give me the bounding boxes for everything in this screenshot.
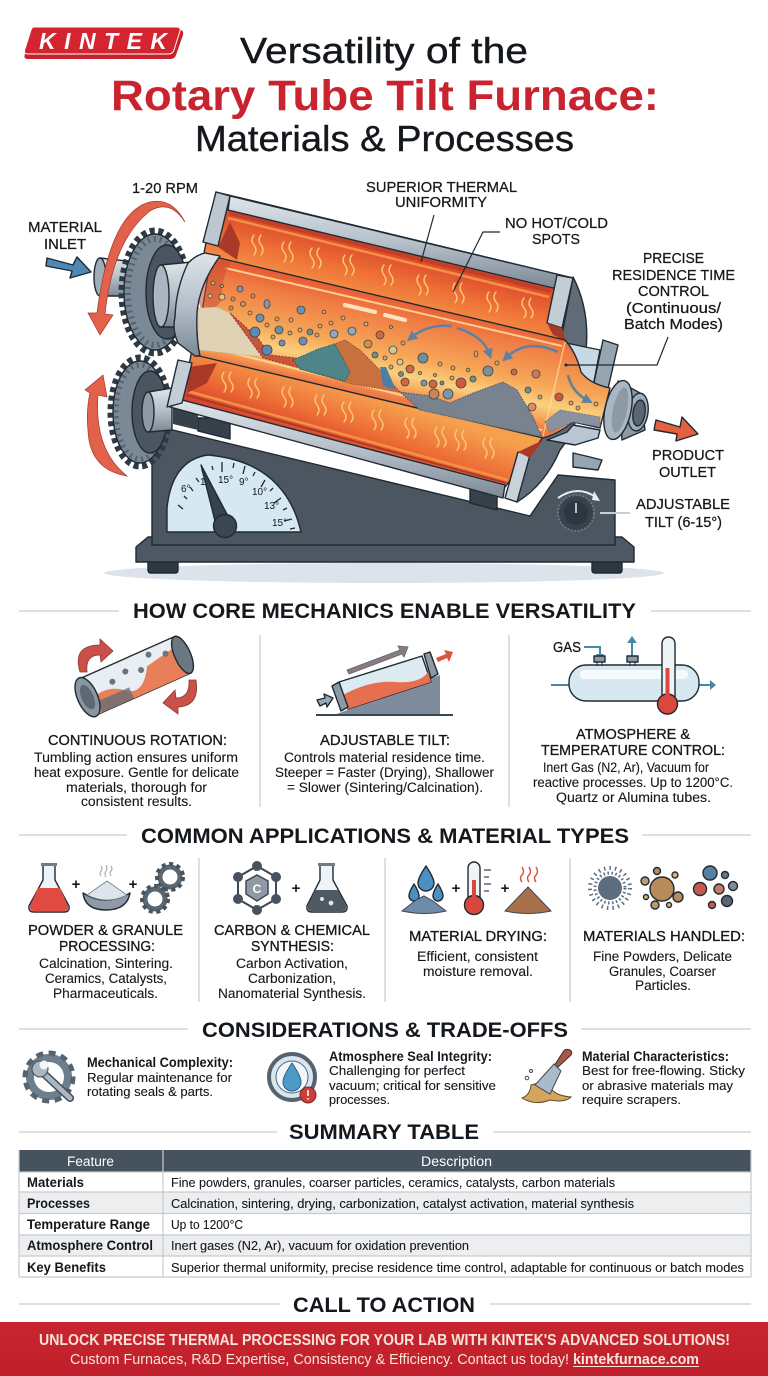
panel: adjustable tilt: ADJUSTABLE TILT: — [320, 733, 450, 749]
summary table: Fine powders, granules, coarser particles, ceramics, catalysts, carbon materials — [171, 1176, 615, 1190]
tube left collar — [174, 253, 220, 356]
summary table — [19, 1150, 751, 1277]
furnace labels: (Continuous/ — [626, 300, 722, 317]
tilt gauge: 9° — [239, 477, 249, 488]
tilt knob — [558, 491, 600, 531]
panel: atmosphere and temperature: Inert Gas (N2, Ar), Vacuum for — [543, 760, 709, 775]
tilt gauge: 13° — [264, 501, 279, 512]
tilt gauge — [167, 455, 301, 538]
icon: molecule and flask — [233, 861, 347, 915]
title: Rotary Tube Tilt Furnace: — [111, 72, 659, 120]
summary table: Feature — [67, 1154, 114, 1169]
panel: continuous rotation: CONTINUOUS ROTATION: — [48, 733, 227, 749]
call to action banner — [0, 1322, 768, 1376]
icon: molecule and flask: C — [253, 882, 262, 896]
icon: droplets, thermometer, heat — [402, 862, 551, 914]
panel: continuous rotation: materials, thorough for — [66, 780, 208, 795]
tilt gauge: 1° — [200, 477, 210, 488]
outlet arrow — [654, 417, 698, 441]
material piles — [198, 307, 600, 437]
panel: materials handled: Granules, Coarser — [609, 964, 716, 979]
panel: atmosphere and temperature: Quartz or Alumina tubes. — [556, 790, 711, 805]
summary table: Processes — [27, 1196, 90, 1211]
panel: materials handled: MATERIALS HANDLED: — [583, 929, 745, 945]
icon: droplets, thermometer, heat: + — [452, 880, 461, 897]
panel: material drying — [402, 862, 551, 979]
panel: mechanical complexity: rotating seals & parts. — [87, 1084, 213, 1099]
summary table: Inert gases (N2, Ar), vacuum for oxidation prevention — [171, 1239, 469, 1253]
icon: flask, powder, gears — [29, 863, 183, 912]
icon: droplets, thermometer, heat: + — [501, 880, 510, 897]
tumbling flow arrows — [412, 326, 587, 400]
furnace labels — [28, 179, 735, 531]
call to action banner: kintekfurnace.com — [573, 1352, 699, 1368]
icon: scraper and sticky material — [522, 1049, 572, 1103]
panel: material characteristics: require scrapers. — [582, 1092, 681, 1107]
panel: adjustable tilt: Controls material residence time. — [284, 750, 485, 765]
panel: powder and granule: Calcination, Sintering. — [39, 956, 173, 971]
panel: powder and granule — [28, 863, 183, 1001]
lower heater housing — [167, 350, 543, 502]
furnace labels: Batch Modes) — [624, 316, 723, 333]
summary table: Materials — [27, 1175, 84, 1190]
call to action banner: Custom Furnaces, R&D Expertise, Consistency & Efficiency. Contact us today! — [70, 1352, 569, 1368]
icon: flask, powder, gears: + — [129, 876, 138, 893]
panel: atmosphere seal integrity: vacuum; critical for sensitive — [329, 1078, 496, 1093]
panel: adjustable tilt: = Slower (Sintering/Calcination). — [287, 780, 483, 795]
furnace labels: UNIFORMITY — [395, 194, 487, 211]
furnace labels: ADJUSTABLE — [636, 496, 730, 513]
stand feet — [148, 560, 622, 573]
summary table: Key Benefits — [27, 1260, 106, 1275]
panel: atmosphere seal integrity: Challenging for perfect — [329, 1063, 465, 1078]
panel: continuous rotation: heat exposure. Gentle for delicate — [34, 765, 239, 780]
furnace labels: MATERIAL — [28, 219, 102, 236]
section heading: applications: COMMON APPLICATIONS & MATERIAL TYPES — [141, 825, 629, 848]
section heading: core mechanics: HOW CORE MECHANICS ENABLE VERSATILITY — [133, 600, 636, 623]
furnace labels: RESIDENCE TIME — [612, 267, 735, 284]
panel: carbon and chemical: Carbon Activation, — [236, 956, 348, 971]
section heading: summary table: SUMMARY TABLE — [289, 1121, 479, 1144]
rear drum — [510, 277, 587, 502]
panel: material drying: moisture removal. — [423, 964, 533, 979]
panel: material characteristics — [522, 1049, 746, 1107]
panel: powder and granule: PROCESSING: — [59, 939, 155, 955]
panel: atmosphere seal integrity — [269, 1049, 496, 1107]
icon: vacuum seal and alert — [269, 1054, 316, 1103]
tilt gauge: 10° — [252, 487, 267, 498]
summary table: Description — [421, 1154, 492, 1169]
furnace labels: SPOTS — [532, 231, 580, 248]
upper heater housing — [203, 192, 573, 345]
stand body — [152, 425, 615, 545]
logo: KINTEK: KINTEK — [39, 28, 168, 54]
icon: molecule and flask: + — [292, 880, 301, 897]
panel: continuous rotation: consistent results. — [81, 794, 192, 809]
section heading: call to action: CALL TO ACTION — [293, 1294, 475, 1317]
base plate — [136, 537, 634, 562]
summary table: Temperature Range — [27, 1217, 150, 1232]
summary table: Superior thermal uniformity, precise residence time control, adaptable for continuous or batch modes — [171, 1261, 744, 1275]
furnace labels: SUPERIOR THERMAL — [366, 179, 517, 196]
panel: material characteristics: or abrasive materials may — [582, 1078, 734, 1093]
panel: material drying: MATERIAL DRYING: — [409, 929, 547, 945]
panel: material drying: Efficient, consistent — [417, 949, 538, 964]
icon: rotating tube — [70, 632, 198, 720]
section heading: considerations: CONSIDERATIONS & TRADE-OFFS — [202, 1019, 568, 1042]
furnace labels: PRECISE — [643, 250, 704, 267]
panel: powder and granule: Pharmaceuticals. — [53, 986, 158, 1001]
panel: carbon and chemical — [214, 861, 370, 1001]
panel: carbon and chemical: CARBON & CHEMICAL — [214, 923, 370, 939]
rotation arrow: upper, inlet side — [88, 201, 185, 335]
panel: adjustable tilt — [275, 646, 494, 795]
summary table: Atmosphere Control — [27, 1238, 153, 1253]
furnace labels: NO HOT/COLD — [505, 215, 608, 232]
outlet bracket — [573, 340, 618, 470]
panel: materials handled: Fine Powders, Delicate — [593, 949, 732, 964]
panel: mechanical complexity: Mechanical Complexity: — [87, 1055, 233, 1070]
floor shadow — [104, 563, 664, 583]
title — [111, 30, 659, 159]
suspended particles — [208, 281, 598, 411]
tilt gauge: 15° — [218, 475, 233, 486]
panel: carbon and chemical: Nanomaterial Synthesis. — [218, 986, 366, 1001]
panel: carbon and chemical: SYNTHESIS: — [251, 939, 334, 955]
panel: atmosphere and temperature — [533, 636, 733, 805]
glass process tube — [195, 256, 610, 438]
icon: flask, powder, gears: + — [72, 876, 81, 893]
panel: atmosphere and temperature: TEMPERATURE CONTROL: — [541, 743, 725, 759]
furnace labels: PRODUCT — [652, 447, 724, 464]
panel: adjustable tilt: Steeper = Faster (Drying), Shallower — [275, 765, 494, 780]
panel: materials handled: Particles. — [635, 978, 691, 993]
panel: continuous rotation — [34, 632, 239, 809]
logo: KINTEK — [24, 27, 183, 59]
upper gear and inlet shaft — [94, 231, 192, 353]
panel: material characteristics: Material Characteristics: — [582, 1049, 729, 1064]
panel: materials handled — [583, 866, 745, 993]
furnace labels: TILT (6-15°) — [645, 514, 722, 531]
icon: gas vessel and thermometer — [551, 636, 716, 714]
panel: atmosphere and temperature: reactive processes. Up to 1200°C. — [533, 775, 733, 790]
panel: mechanical complexity — [25, 1053, 233, 1101]
panel: atmosphere seal integrity: processes. — [329, 1092, 390, 1107]
leader lines — [421, 215, 668, 366]
housing mounts — [198, 418, 497, 510]
tilt gauge: 6° — [181, 484, 191, 495]
tilt gauge: 15° — [272, 518, 287, 529]
title: Materials & Processes — [195, 118, 574, 159]
panel: carbon and chemical: Carbonization, — [248, 971, 336, 986]
summary table: Up to 1200°C — [171, 1218, 243, 1232]
furnace labels: CONTROL — [638, 283, 709, 300]
furnace illustration — [46, 192, 698, 583]
inlet arrow — [46, 257, 91, 278]
rotation arrow: lower — [85, 375, 127, 476]
icon: gear and wrench — [25, 1053, 73, 1101]
icon: particle clusters — [590, 866, 738, 909]
panel: atmosphere seal integrity: Atmosphere Seal Integrity: — [329, 1049, 492, 1064]
panel: powder and granule: Ceramics, Catalysts, — [45, 971, 167, 986]
panel: powder and granule: POWDER & GRANULE — [28, 923, 183, 939]
title: Versatility of the — [240, 30, 528, 71]
outlet flange and pipe — [599, 378, 651, 442]
panel: material characteristics: Best for free-flowing. Sticky — [582, 1063, 746, 1078]
summary table: Calcination, sintering, drying, carbonization, catalyst activation, material synthesis — [171, 1197, 634, 1211]
tube highlights — [200, 268, 562, 430]
panel: atmosphere and temperature: ATMOSPHERE & — [576, 727, 690, 743]
furnace labels: INLET — [44, 236, 86, 253]
icon: gas vessel and thermometer: GAS — [553, 640, 581, 656]
furnace labels: OUTLET — [659, 464, 716, 481]
lower gear — [111, 358, 172, 466]
furnace labels: 1-20 RPM — [132, 180, 198, 197]
panel: continuous rotation: Tumbling action ensures uniform — [34, 750, 238, 765]
white gap under housing — [230, 424, 560, 512]
icon: tilted tube on ramp — [316, 646, 453, 715]
panel: mechanical complexity: Regular maintenance for — [87, 1070, 233, 1085]
